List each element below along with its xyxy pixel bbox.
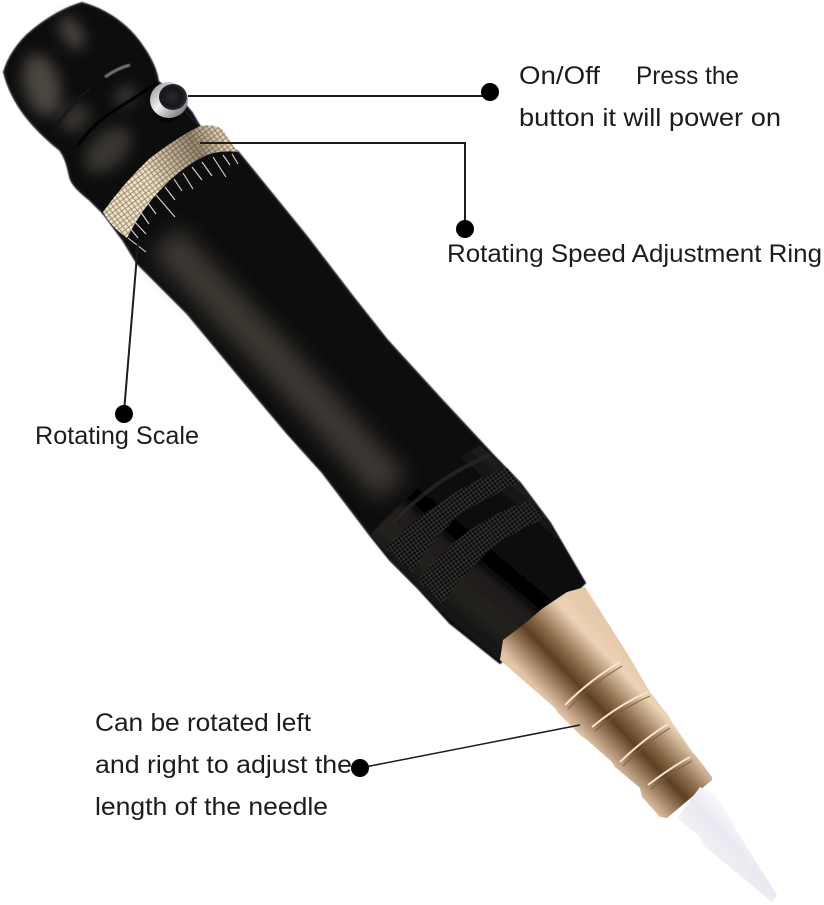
callout: needle length: length of the needle <box>95 793 328 821</box>
callout: on/off button: button it will power on <box>519 104 781 132</box>
callout: rotating scale: Rotating Scale <box>35 422 199 450</box>
lower collar shading <box>370 445 585 663</box>
pen body barrel <box>103 82 585 663</box>
scale ticks <box>128 154 238 252</box>
gold needle cone <box>500 587 712 818</box>
callout: on/off button <box>188 62 781 132</box>
barrel highlight <box>165 240 392 488</box>
callout: speed ring <box>200 143 822 268</box>
pen cap <box>4 3 200 213</box>
cone grooves <box>565 662 690 785</box>
callout: rotating scale <box>35 243 199 450</box>
callout: on/off button: Press the <box>636 62 739 90</box>
cap groove <box>78 82 158 145</box>
gold speed ring <box>103 125 238 238</box>
callout: needle length <box>95 709 580 821</box>
knurled grip band 1 <box>385 468 520 572</box>
callout: on/off button: On/Off <box>519 62 600 90</box>
collar groove <box>393 455 490 523</box>
callout: speed ring: Rotating Speed Adjustment Ring <box>447 240 822 268</box>
needle tip <box>677 787 777 902</box>
power button <box>147 82 189 128</box>
callout: needle length: Can be rotated left <box>95 709 311 737</box>
knurled grip band 2 <box>418 501 546 604</box>
cap highlights <box>16 12 140 182</box>
callout: needle length: and right to adjust the <box>95 751 352 779</box>
